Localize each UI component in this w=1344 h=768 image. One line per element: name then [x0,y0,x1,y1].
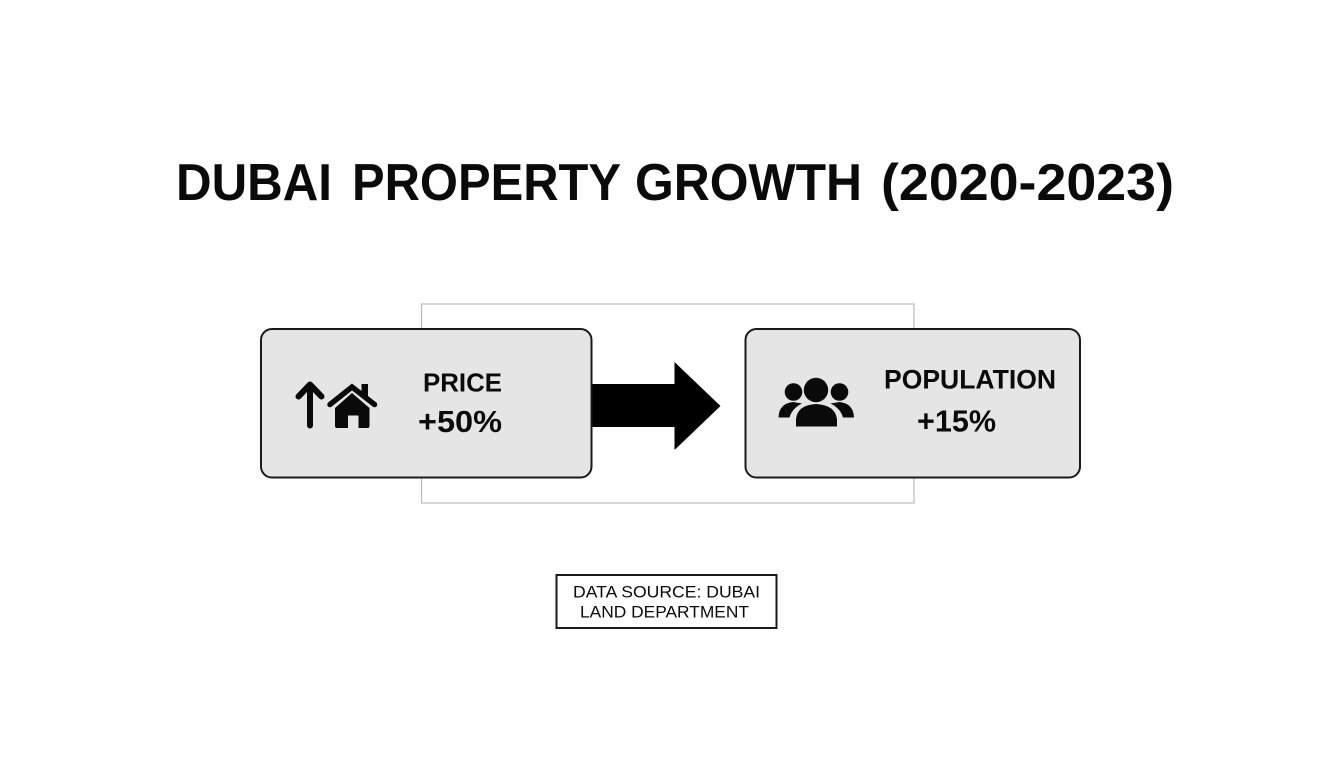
population label: POPULATION [884,364,1056,394]
data source box: DATA SOURCE: DUBAI [573,582,760,602]
data source box [556,575,776,628]
population value: +15% [917,404,996,438]
panel: price [261,329,592,478]
panel: population [746,329,1080,478]
arrow: price to population [591,362,720,450]
title: PROPERTY [352,154,621,212]
title: DUBAI [176,154,332,212]
title: (2020-2023) [881,154,1174,212]
icon: house [330,384,374,428]
population card background [746,329,1080,478]
title: GROWTH [635,154,862,212]
icon: people [778,378,854,426]
price value: +50% [418,404,502,439]
icon: up arrow [298,384,322,426]
background frame [422,304,914,503]
price card background [261,329,592,478]
data source box: LAND DEPARTMENT [580,602,749,622]
title [176,154,1174,212]
price label: PRICE [423,370,502,398]
